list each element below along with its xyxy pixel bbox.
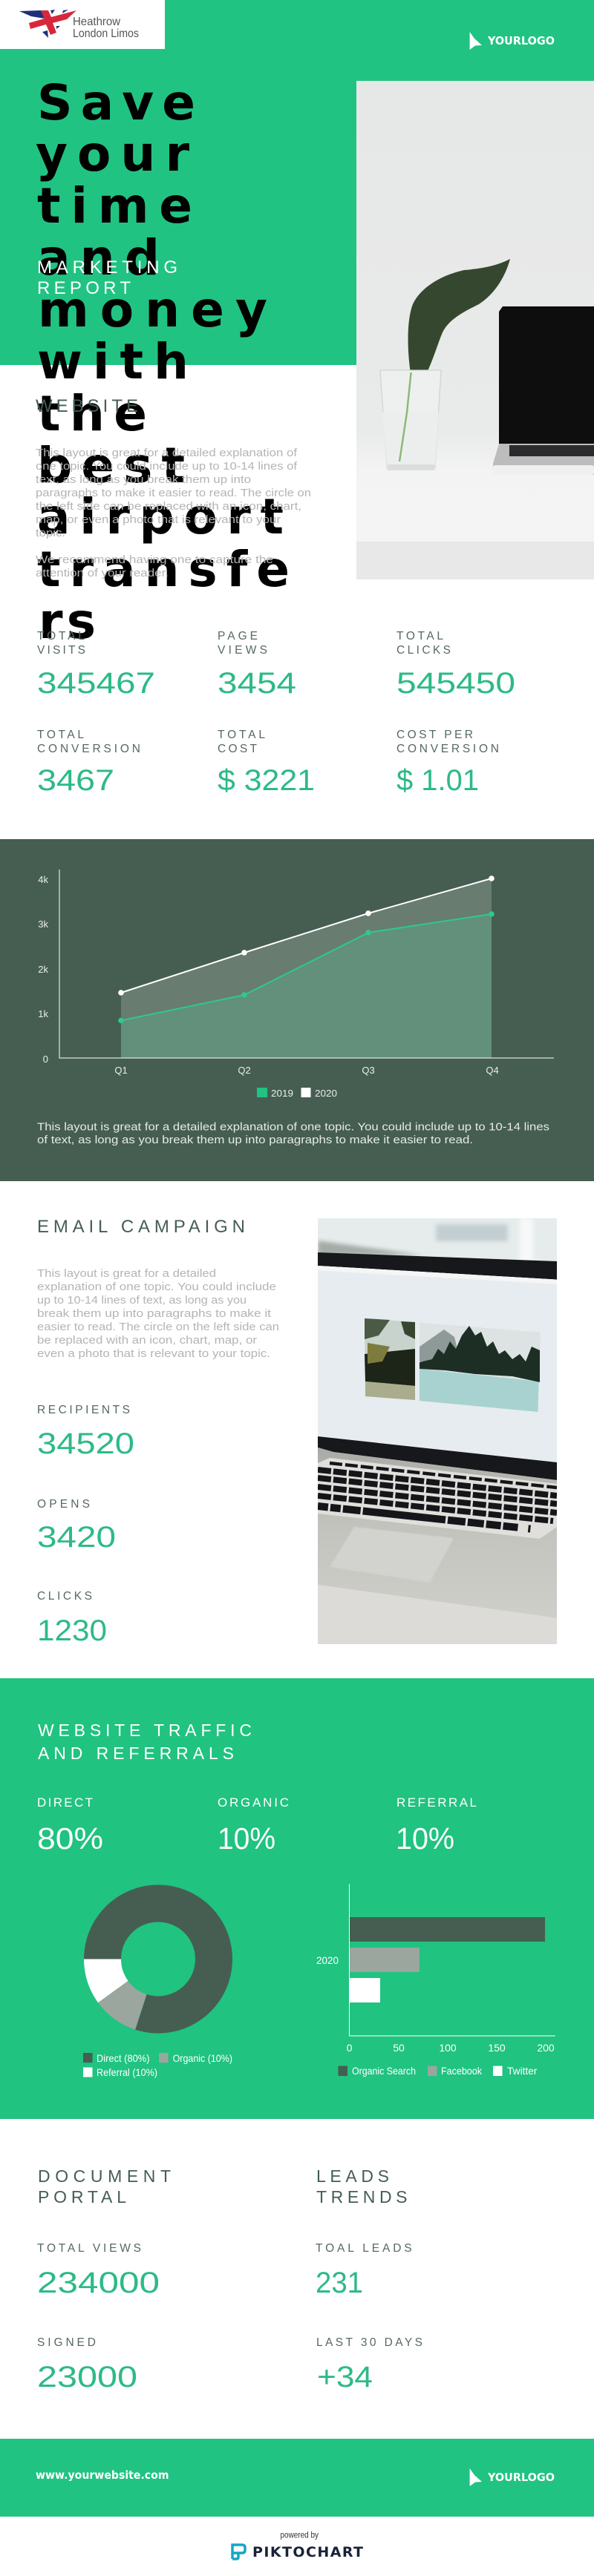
horizontal bar chart: 50 (393, 2042, 405, 2054)
heading: website traffic and referrals (38, 1721, 252, 1763)
stat: organic: ORGANIC (218, 1795, 289, 1810)
stat: page views: VIEWS (218, 644, 267, 657)
main title: and (37, 229, 160, 286)
area chart: Q4 (486, 1065, 499, 1076)
client logo: Heathrow London Limos: Heathrow (73, 16, 120, 28)
stat: total visits: TOTAL (37, 630, 85, 643)
area chart: 3k (38, 919, 48, 930)
client logo: Heathrow London Limos: London Limos (73, 27, 139, 40)
bar chart legend: Twitter (507, 2065, 538, 2077)
stat: referral (396, 1795, 477, 1856)
horizontal bar chart: 200 (537, 2042, 555, 2054)
subtitle: marketing report (37, 257, 177, 298)
website description (36, 447, 311, 579)
stat: signed: SIGNED (37, 2336, 96, 2349)
donut legend: Organic (10%) (173, 2052, 232, 2064)
main title: rs (39, 593, 96, 650)
website description: This layout is great for a detailed explanation of (36, 447, 298, 459)
website description: text, as long as you break them up into (36, 473, 251, 486)
stat: organic (218, 1795, 289, 1856)
main title: the (37, 385, 147, 442)
main title: transfe (37, 541, 290, 598)
main title: Save (37, 74, 195, 131)
stat: signed: 23000 (37, 2361, 137, 2393)
stat: total conversion: CONVERSION (37, 743, 140, 755)
chart legend (257, 1088, 337, 1099)
stat: total clicks: CLICKS (396, 644, 451, 657)
subtitle: marketing report: REPORT (37, 278, 131, 298)
stat: referral: 10% (396, 1821, 454, 1856)
chart description: This layout is great for a detailed explanation of one topic. You could include up to 10-14 lines (37, 1120, 549, 1134)
stat: total cost: $ 3221 (218, 764, 315, 797)
area chart: 4k (38, 874, 48, 885)
chart legend: 2020 (315, 1088, 337, 1099)
donut legend: Direct (80%) (97, 2052, 150, 2064)
email description: be replaced with an icon, chart, map, or (37, 1334, 257, 1347)
area chart (38, 870, 554, 1076)
donut legend: Referral (10%) (97, 2066, 157, 2078)
stat: cost per conversion: CONVERSION (396, 743, 499, 755)
heading: website traffic and referrals: AND REFERRALS (38, 1744, 234, 1763)
stat: total visits: 345467 (37, 667, 155, 700)
stat: last 30 days: LAST 30 DAYS (316, 2336, 422, 2349)
email description (37, 1267, 279, 1360)
icon: piktochart mark (232, 2545, 245, 2559)
stat: total conversion (37, 729, 140, 797)
footer logo: YOURLOGO (470, 2468, 555, 2486)
top logo: YOURLOGO (470, 32, 555, 50)
subtitle: marketing report: MARKETING (37, 257, 177, 277)
stat: direct: DIRECT (37, 1795, 93, 1810)
stat: total visits: VISITS (37, 644, 85, 657)
stat: recipients (37, 1404, 134, 1460)
stat: organic: 10% (218, 1821, 275, 1856)
horizontal bar chart: 2020 (316, 1954, 339, 1966)
stat: total clicks (396, 630, 515, 700)
photo: plant in glass beside laptop (356, 81, 594, 579)
main title: airport (37, 488, 284, 545)
stat: page views: PAGE (218, 630, 258, 643)
heading: leads trends: LEADS (316, 2166, 389, 2186)
stat: opens (37, 1498, 116, 1554)
area chart: Q1 (114, 1065, 128, 1076)
stat: cost per conversion: COST PER (396, 729, 473, 741)
stat: last 30 days (316, 2336, 422, 2393)
footer band (0, 2439, 594, 2517)
stat: opens: 3420 (37, 1521, 116, 1554)
website description: the left side can be replaced with an icon, chart, (36, 500, 301, 513)
stat: clicks: CLICKS (37, 1590, 92, 1603)
stat: clicks (37, 1590, 107, 1647)
stat: signed (37, 2336, 137, 2393)
powered by piktochart: PIKTOCHART (252, 2544, 363, 2560)
stat: cost per conversion (396, 729, 499, 797)
powered by piktochart: powered by (281, 2530, 319, 2540)
stat: total conversion: TOTAL (37, 729, 84, 741)
stat: opens: OPENS (37, 1498, 90, 1511)
chart description (37, 1120, 549, 1146)
website description: map, or even a photo that is relevant to your (36, 513, 281, 526)
stat: total leads (316, 2242, 412, 2299)
heading: leads trends: TRENDS (316, 2187, 407, 2207)
stat: clicks: 1230 (37, 1614, 107, 1647)
stat: total leads: TOAL LEADS (316, 2242, 412, 2255)
stat: direct (37, 1795, 103, 1856)
heading: document portal (38, 2166, 171, 2207)
area chart: 1k (38, 1008, 48, 1019)
stat: total conversion: 3467 (37, 764, 114, 797)
heading: email campaign: EMAIL CAMPAIGN (37, 1217, 245, 1237)
stat: direct: 80% (37, 1821, 103, 1856)
stat: last 30 days: +34 (317, 2361, 373, 2393)
email description: easier to read. The circle on the left side can (37, 1321, 279, 1333)
main title: your (36, 125, 189, 183)
stat: page views (218, 630, 296, 700)
top logo: YOURLOGO: YOURLOGO (487, 34, 555, 47)
email description: break them up into paragraphs to make it (37, 1307, 272, 1320)
stat: page views: 3454 (218, 667, 296, 700)
stat: total cost (218, 729, 315, 797)
bar chart legend: Facebook (441, 2065, 483, 2077)
heading: website traffic and referrals: WEBSITE TRAFFIC (38, 1721, 252, 1740)
horizontal bar chart: 150 (488, 2042, 506, 2054)
stat: total clicks: 545450 (396, 667, 515, 700)
photo: laptop on desk (318, 1218, 557, 1644)
stat: cost per conversion: $ 1.01 (396, 764, 479, 797)
main title: money (38, 281, 267, 338)
donut legend (83, 2052, 232, 2078)
area chart: 2k (38, 964, 48, 975)
stat: total views: 234000 (37, 2267, 160, 2299)
main title (36, 74, 290, 650)
stat: referral: REFERRAL (396, 1795, 477, 1810)
area chart: Q3 (362, 1065, 375, 1076)
stat: recipients: RECIPIENTS (37, 1404, 130, 1416)
main title: best (37, 437, 185, 494)
main title: with (37, 333, 189, 390)
website description: one topic. You could include up to 10-14 lines of (36, 460, 298, 473)
stat: total views (37, 2242, 160, 2299)
stat: total cost: TOTAL (218, 729, 265, 741)
header green panel (0, 0, 594, 365)
stat: total visits (37, 630, 155, 700)
heading: website: WEBSITE (36, 396, 138, 416)
client logo: Heathrow London Limos (0, 0, 165, 49)
website description: We recommend having one to capture the (36, 553, 273, 566)
heading: leads trends (316, 2166, 407, 2207)
email description: up to 10-14 lines of text, as long as you (37, 1294, 247, 1307)
stat: total views: TOTAL VIEWS (37, 2242, 141, 2255)
heading: document portal: PORTAL (38, 2187, 126, 2207)
email description: This layout is great for a detailed (37, 1267, 216, 1280)
website description: attention of your reader. (36, 567, 169, 579)
stat: total clicks: TOTAL (396, 630, 443, 643)
bar chart legend (339, 2065, 538, 2077)
website address: www.yourwebsite.com (36, 2468, 169, 2482)
stat: total cost: COST (218, 743, 258, 755)
horizontal bar chart: 0 (347, 2042, 353, 2054)
email description: even a photo that is relevant to your topic. (37, 1347, 270, 1360)
panel: quarterly area chart (0, 839, 594, 1181)
stat: total leads: 231 (316, 2267, 363, 2299)
area chart: Q2 (238, 1065, 251, 1076)
chart legend: 2019 (271, 1088, 293, 1099)
footer logo: YOURLOGO: YOURLOGO (487, 2471, 555, 2484)
main title: time (37, 177, 192, 234)
donut chart (84, 1885, 232, 2033)
email description: explanation of one topic. You could include (37, 1281, 276, 1293)
panel: website traffic and referrals (0, 1678, 594, 2119)
heading: document portal: DOCUMENT (38, 2166, 171, 2186)
powered by piktochart (232, 2530, 363, 2560)
horizontal bar chart: 100 (439, 2042, 457, 2054)
area chart: 0 (43, 1054, 48, 1065)
horizontal bar chart (316, 1885, 555, 2054)
website description: topic. (36, 527, 65, 539)
website description: paragraphs to make it easier to read. The circle on (36, 487, 311, 499)
stat: recipients: 34520 (37, 1427, 134, 1460)
bar chart legend: Organic Search (352, 2065, 416, 2077)
chart description: of text, as long as you break them up into paragraphs to make it easier to read. (37, 1134, 473, 1146)
